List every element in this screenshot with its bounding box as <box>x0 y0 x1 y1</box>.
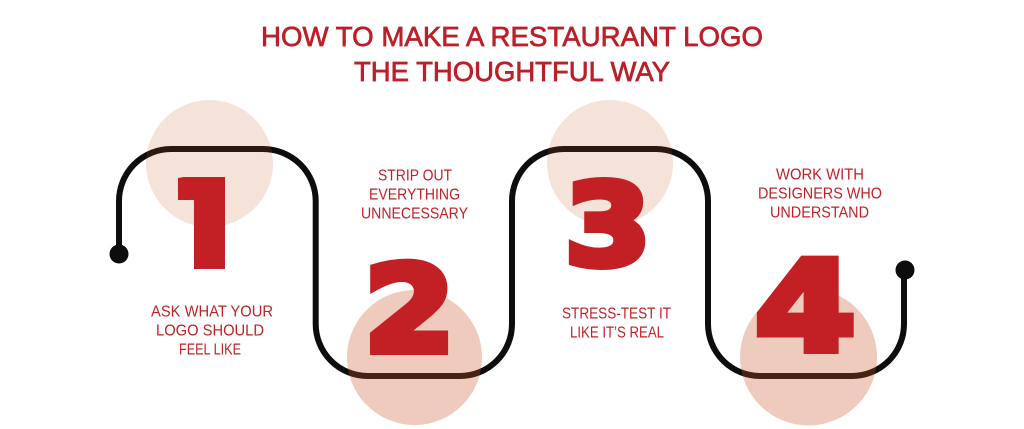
step 2 label: UNNECESSARY <box>361 206 468 222</box>
step 1 label <box>151 304 273 358</box>
step 2 label: EVERYTHING <box>369 186 460 204</box>
step 1 circle <box>146 100 273 227</box>
step 3 circle <box>547 100 673 226</box>
step 4 label: DESIGNERS WHO <box>758 186 882 202</box>
step 1 label: FEEL LIKE <box>179 342 241 358</box>
numeral 4: 4 <box>755 235 856 379</box>
numeral 2: 2 <box>364 241 455 380</box>
step 2 label <box>361 168 468 222</box>
winding path <box>110 149 914 376</box>
step 3 label: LIKE IT’S REAL <box>570 324 664 342</box>
numeral 3: 3 <box>565 161 651 291</box>
step 4 label <box>758 166 882 222</box>
step 3 label: STRESS-TEST IT <box>562 306 671 322</box>
step 4 label: WORK WITH <box>776 166 864 184</box>
step 2 label: STRIP OUT <box>378 168 452 184</box>
step 1 label: LOGO SHOULD <box>156 322 264 340</box>
step 4 label: UNDERSTAND <box>770 204 869 222</box>
numeral 1: 1 <box>153 155 262 300</box>
title <box>261 21 763 87</box>
step 3 label <box>562 306 671 342</box>
title: THE THOUGHTFUL WAY <box>354 56 670 87</box>
step 4 circle <box>740 288 877 426</box>
step 2 circle <box>347 290 482 425</box>
step 1 label: ASK WHAT YOUR <box>151 304 273 320</box>
title: HOW TO MAKE A RESTAURANT LOGO <box>261 21 763 52</box>
